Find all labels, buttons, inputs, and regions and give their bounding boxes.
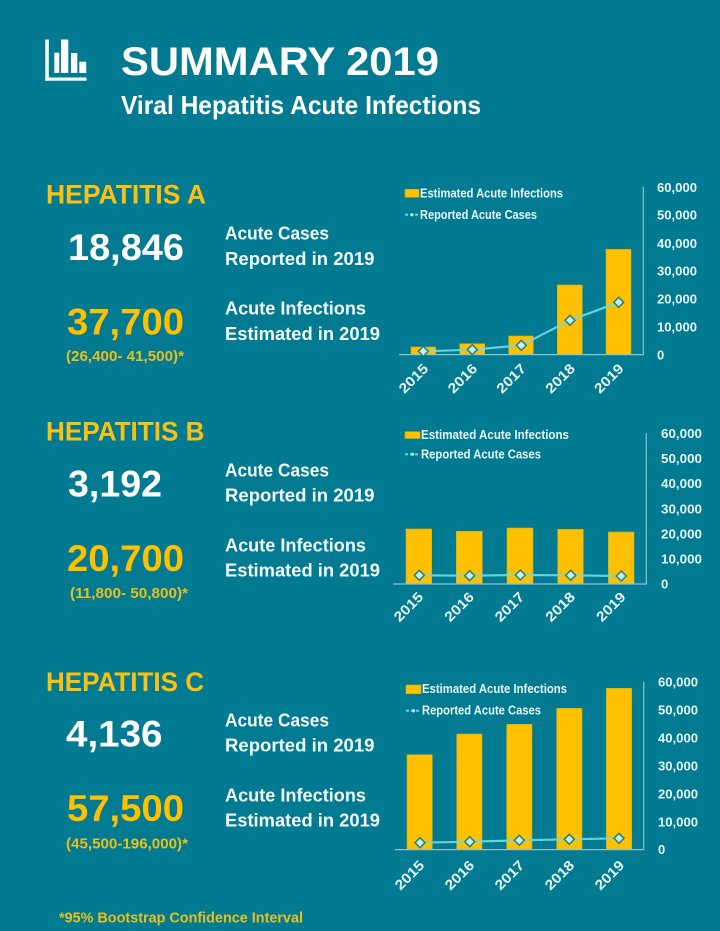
reported cases label B: [225, 461, 374, 506]
y axis labels C: 50,000: [658, 702, 698, 717]
legend A: Reported Acute Cases: [420, 208, 537, 222]
x axis labels C: [391, 857, 627, 893]
line series A: [418, 297, 624, 356]
x axis labels C: 2018: [541, 857, 577, 893]
x axis labels A: [395, 360, 627, 396]
estimated infections label A: Estimated in 2019: [225, 324, 380, 344]
line series C: [415, 833, 624, 848]
reported cases label A: [225, 223, 374, 269]
estimated infections label B: Estimated in 2019: [225, 561, 380, 581]
reported cases label A: Acute Cases: [225, 223, 329, 243]
y axis labels A: 40,000: [657, 236, 697, 251]
panel: hepatitis B: [46, 417, 702, 625]
estimated infections label A: [225, 298, 380, 344]
x axis labels A: 2017: [493, 360, 529, 396]
line series B: [414, 570, 626, 581]
estimated infections label C: Estimated in 2019: [225, 811, 380, 831]
estimated infections label B: Acute Infections: [225, 536, 366, 556]
x axis labels C: 2015: [391, 857, 427, 893]
legend B: [405, 428, 569, 461]
panel: hepatitis C: [46, 667, 698, 893]
title: SUMMARY 2019: [121, 40, 439, 84]
y axis labels C: 20,000: [658, 786, 698, 801]
y axis labels A: 60,000: [657, 180, 697, 195]
estimated infections label A: Acute Infections: [225, 298, 366, 318]
y axis labels A: 0: [657, 348, 664, 363]
x axis labels A: 2019: [591, 360, 627, 396]
y axis labels A: 30,000: [657, 264, 697, 279]
x axis labels B: 2018: [542, 589, 578, 625]
x axis labels C: 2019: [591, 857, 627, 893]
legend C: Reported Acute Cases: [422, 704, 541, 718]
confidence interval A: (26,400- 41,500)*: [66, 348, 184, 365]
heading: hepatitis A: HEPATITIS A: [46, 179, 206, 209]
subtitle: Viral Hepatitis Acute Infections: [121, 90, 481, 120]
estimated infections label C: Acute Infections: [225, 786, 366, 806]
estimated infections number A: 37,700: [67, 300, 184, 342]
reported cases number C: 4,136: [66, 713, 162, 755]
icon: bar chart: [45, 40, 86, 81]
x axis labels B: 2017: [491, 589, 527, 625]
confidence interval B: (11,800- 50,800)*: [70, 585, 188, 602]
reported cases number B: 3,192: [68, 463, 162, 505]
y axis labels B: 10,000: [661, 551, 702, 566]
y axis labels B: 50,000: [661, 451, 702, 466]
y axis labels C: 30,000: [658, 758, 698, 773]
x axis labels C: 2017: [491, 857, 527, 893]
y axis labels C: 40,000: [658, 730, 698, 745]
reported cases label C: Acute Cases: [225, 711, 329, 731]
reported cases label B: Reported in 2019: [225, 486, 374, 506]
y axis labels B: 40,000: [661, 476, 702, 491]
panel: hepatitis A: [46, 179, 697, 396]
bars C: [407, 688, 632, 849]
reported cases label C: [225, 711, 374, 756]
x axis labels A: 2016: [444, 360, 480, 396]
y axis labels A: 50,000: [657, 207, 697, 222]
reported cases label A: Reported in 2019: [225, 249, 374, 269]
legend A: Estimated Acute Infections: [420, 186, 563, 200]
heading: hepatitis B: HEPATITIS B: [46, 417, 204, 447]
y axis labels C: 0: [658, 842, 665, 857]
x axis labels B: 2015: [390, 589, 426, 625]
legend C: [406, 682, 567, 718]
reported cases number A: 18,846: [68, 226, 184, 268]
y axis labels A: 10,000: [657, 319, 697, 334]
x axis labels B: 2019: [593, 589, 629, 625]
y axis labels C: 60,000: [658, 674, 698, 689]
x axis labels C: 2016: [441, 857, 477, 893]
y axis labels A: 20,000: [657, 292, 697, 307]
reported cases label B: Acute Cases: [225, 461, 329, 481]
chart: hepatitis A: [395, 180, 697, 396]
legend B: Reported Acute Cases: [421, 447, 541, 461]
confidence interval C: (45,500-196,000)*: [66, 836, 188, 852]
reported cases label C: Reported in 2019: [225, 736, 374, 756]
x axis labels A: 2015: [395, 360, 431, 396]
y axis labels B: 20,000: [661, 526, 702, 541]
legend B: Estimated Acute Infections: [421, 428, 569, 442]
chart: hepatitis C: [391, 674, 698, 893]
estimated infections number C: 57,500: [67, 787, 184, 829]
heading: hepatitis C: HEPATITIS C: [46, 667, 204, 697]
bars A: [411, 249, 631, 354]
bars B: [406, 528, 634, 584]
legend C: Estimated Acute Infections: [422, 682, 567, 696]
y axis labels C: [658, 674, 698, 857]
x axis labels B: 2016: [441, 589, 477, 625]
estimated infections label B: [225, 536, 380, 581]
y axis labels C: 10,000: [658, 814, 698, 829]
footnote: *95% Bootstrap Confidence Interval: [59, 910, 303, 927]
estimated infections label C: [225, 786, 380, 831]
y axis labels B: 60,000: [661, 426, 702, 441]
chart: hepatitis B: [390, 426, 702, 625]
x axis labels A: 2018: [542, 360, 578, 396]
y axis labels B: [661, 426, 702, 592]
estimated infections number B: 20,700: [67, 537, 184, 579]
legend A: [405, 186, 563, 222]
y axis labels B: 30,000: [661, 501, 702, 516]
x axis labels B: [390, 589, 629, 625]
y axis labels B: 0: [661, 577, 668, 592]
y axis labels A: [657, 180, 697, 363]
